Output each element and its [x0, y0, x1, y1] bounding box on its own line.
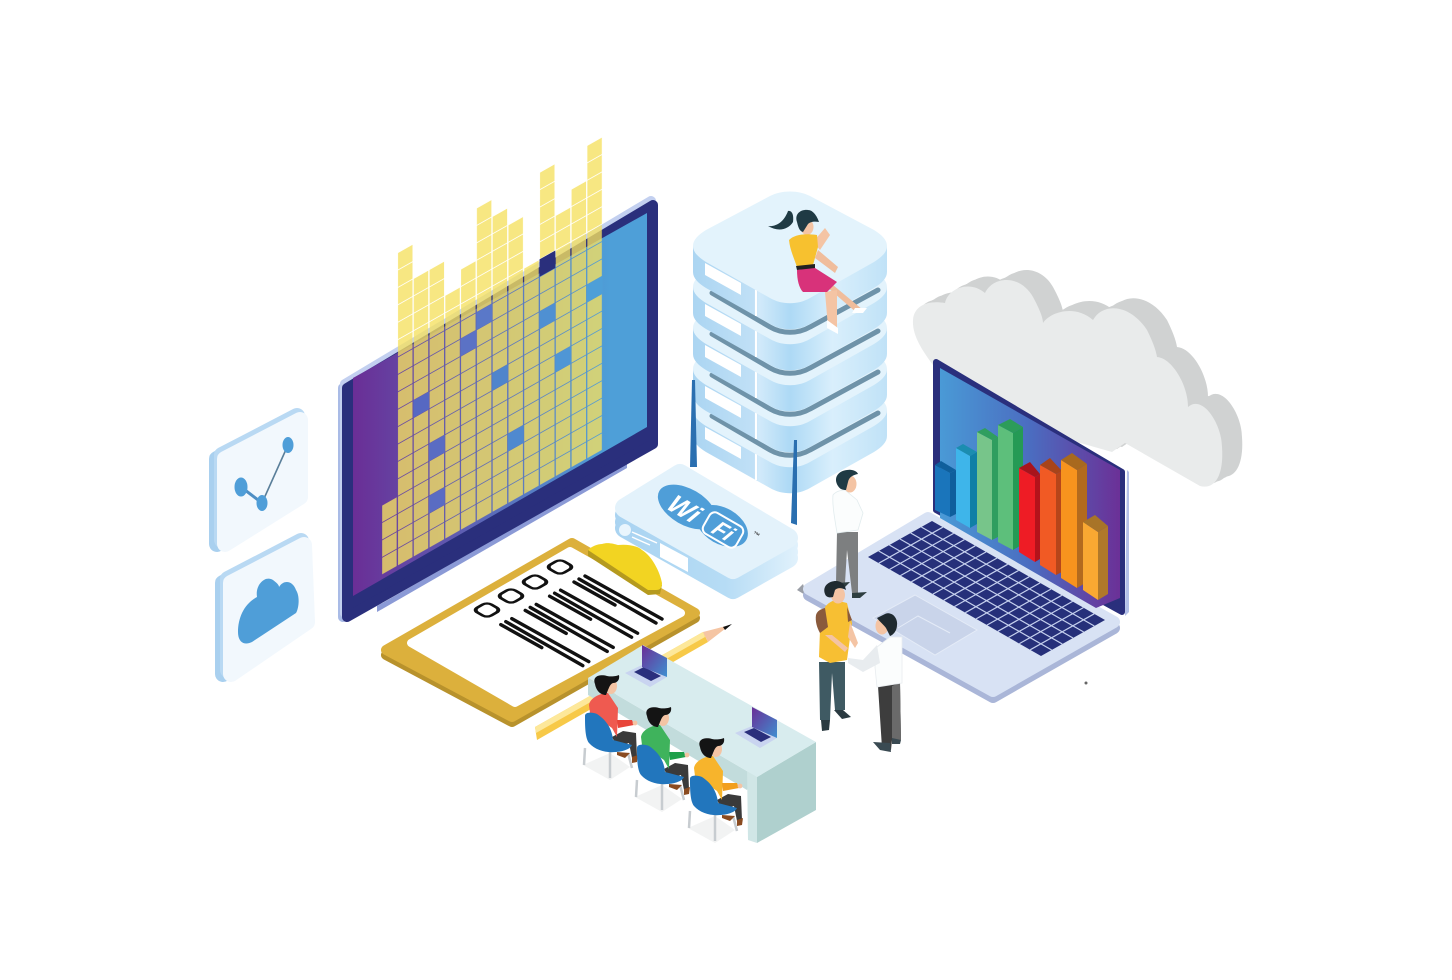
icon tile: cloud — [223, 541, 307, 674]
person: man in white shirt shaking hands — [848, 613, 902, 752]
seated person: green shirt — [635, 707, 690, 812]
server stack — [693, 192, 887, 493]
wifi logo — [650, 475, 761, 556]
paper — [411, 551, 681, 703]
wifi logo: ™ — [751, 531, 761, 540]
wifi logo: Wi — [661, 489, 708, 529]
wifi logo: Fi — [707, 517, 741, 546]
icon tile: line chart — [217, 416, 300, 544]
pencil — [535, 624, 732, 740]
keyboard — [868, 521, 1105, 656]
small laptop 2 — [735, 707, 777, 748]
touchpad — [873, 595, 977, 655]
check boxes — [473, 559, 574, 618]
empty grid cells — [413, 250, 603, 513]
text lines — [501, 576, 662, 666]
meeting table — [588, 645, 816, 843]
data grid columns — [382, 137, 603, 575]
monitor with data grid — [343, 137, 653, 617]
laptop base — [809, 524, 1114, 697]
seated person: orange shirt — [688, 738, 743, 843]
girl sitting on server — [768, 210, 867, 334]
clip — [588, 543, 662, 595]
small laptop 1 — [625, 645, 667, 687]
clipboard — [386, 543, 695, 722]
person: man standing with crossed arms — [833, 470, 867, 598]
laptop screen — [1125, 470, 1129, 616]
laptop — [797, 362, 1129, 697]
monitor screen — [353, 213, 647, 596]
seated person: red shirt — [583, 675, 638, 780]
wifi router — [619, 474, 788, 589]
router antennas — [690, 380, 797, 525]
cloud — [913, 270, 1242, 487]
bar chart — [935, 419, 1108, 600]
stray dot — [1084, 682, 1088, 684]
person: man in yellow shirt — [816, 581, 858, 731]
